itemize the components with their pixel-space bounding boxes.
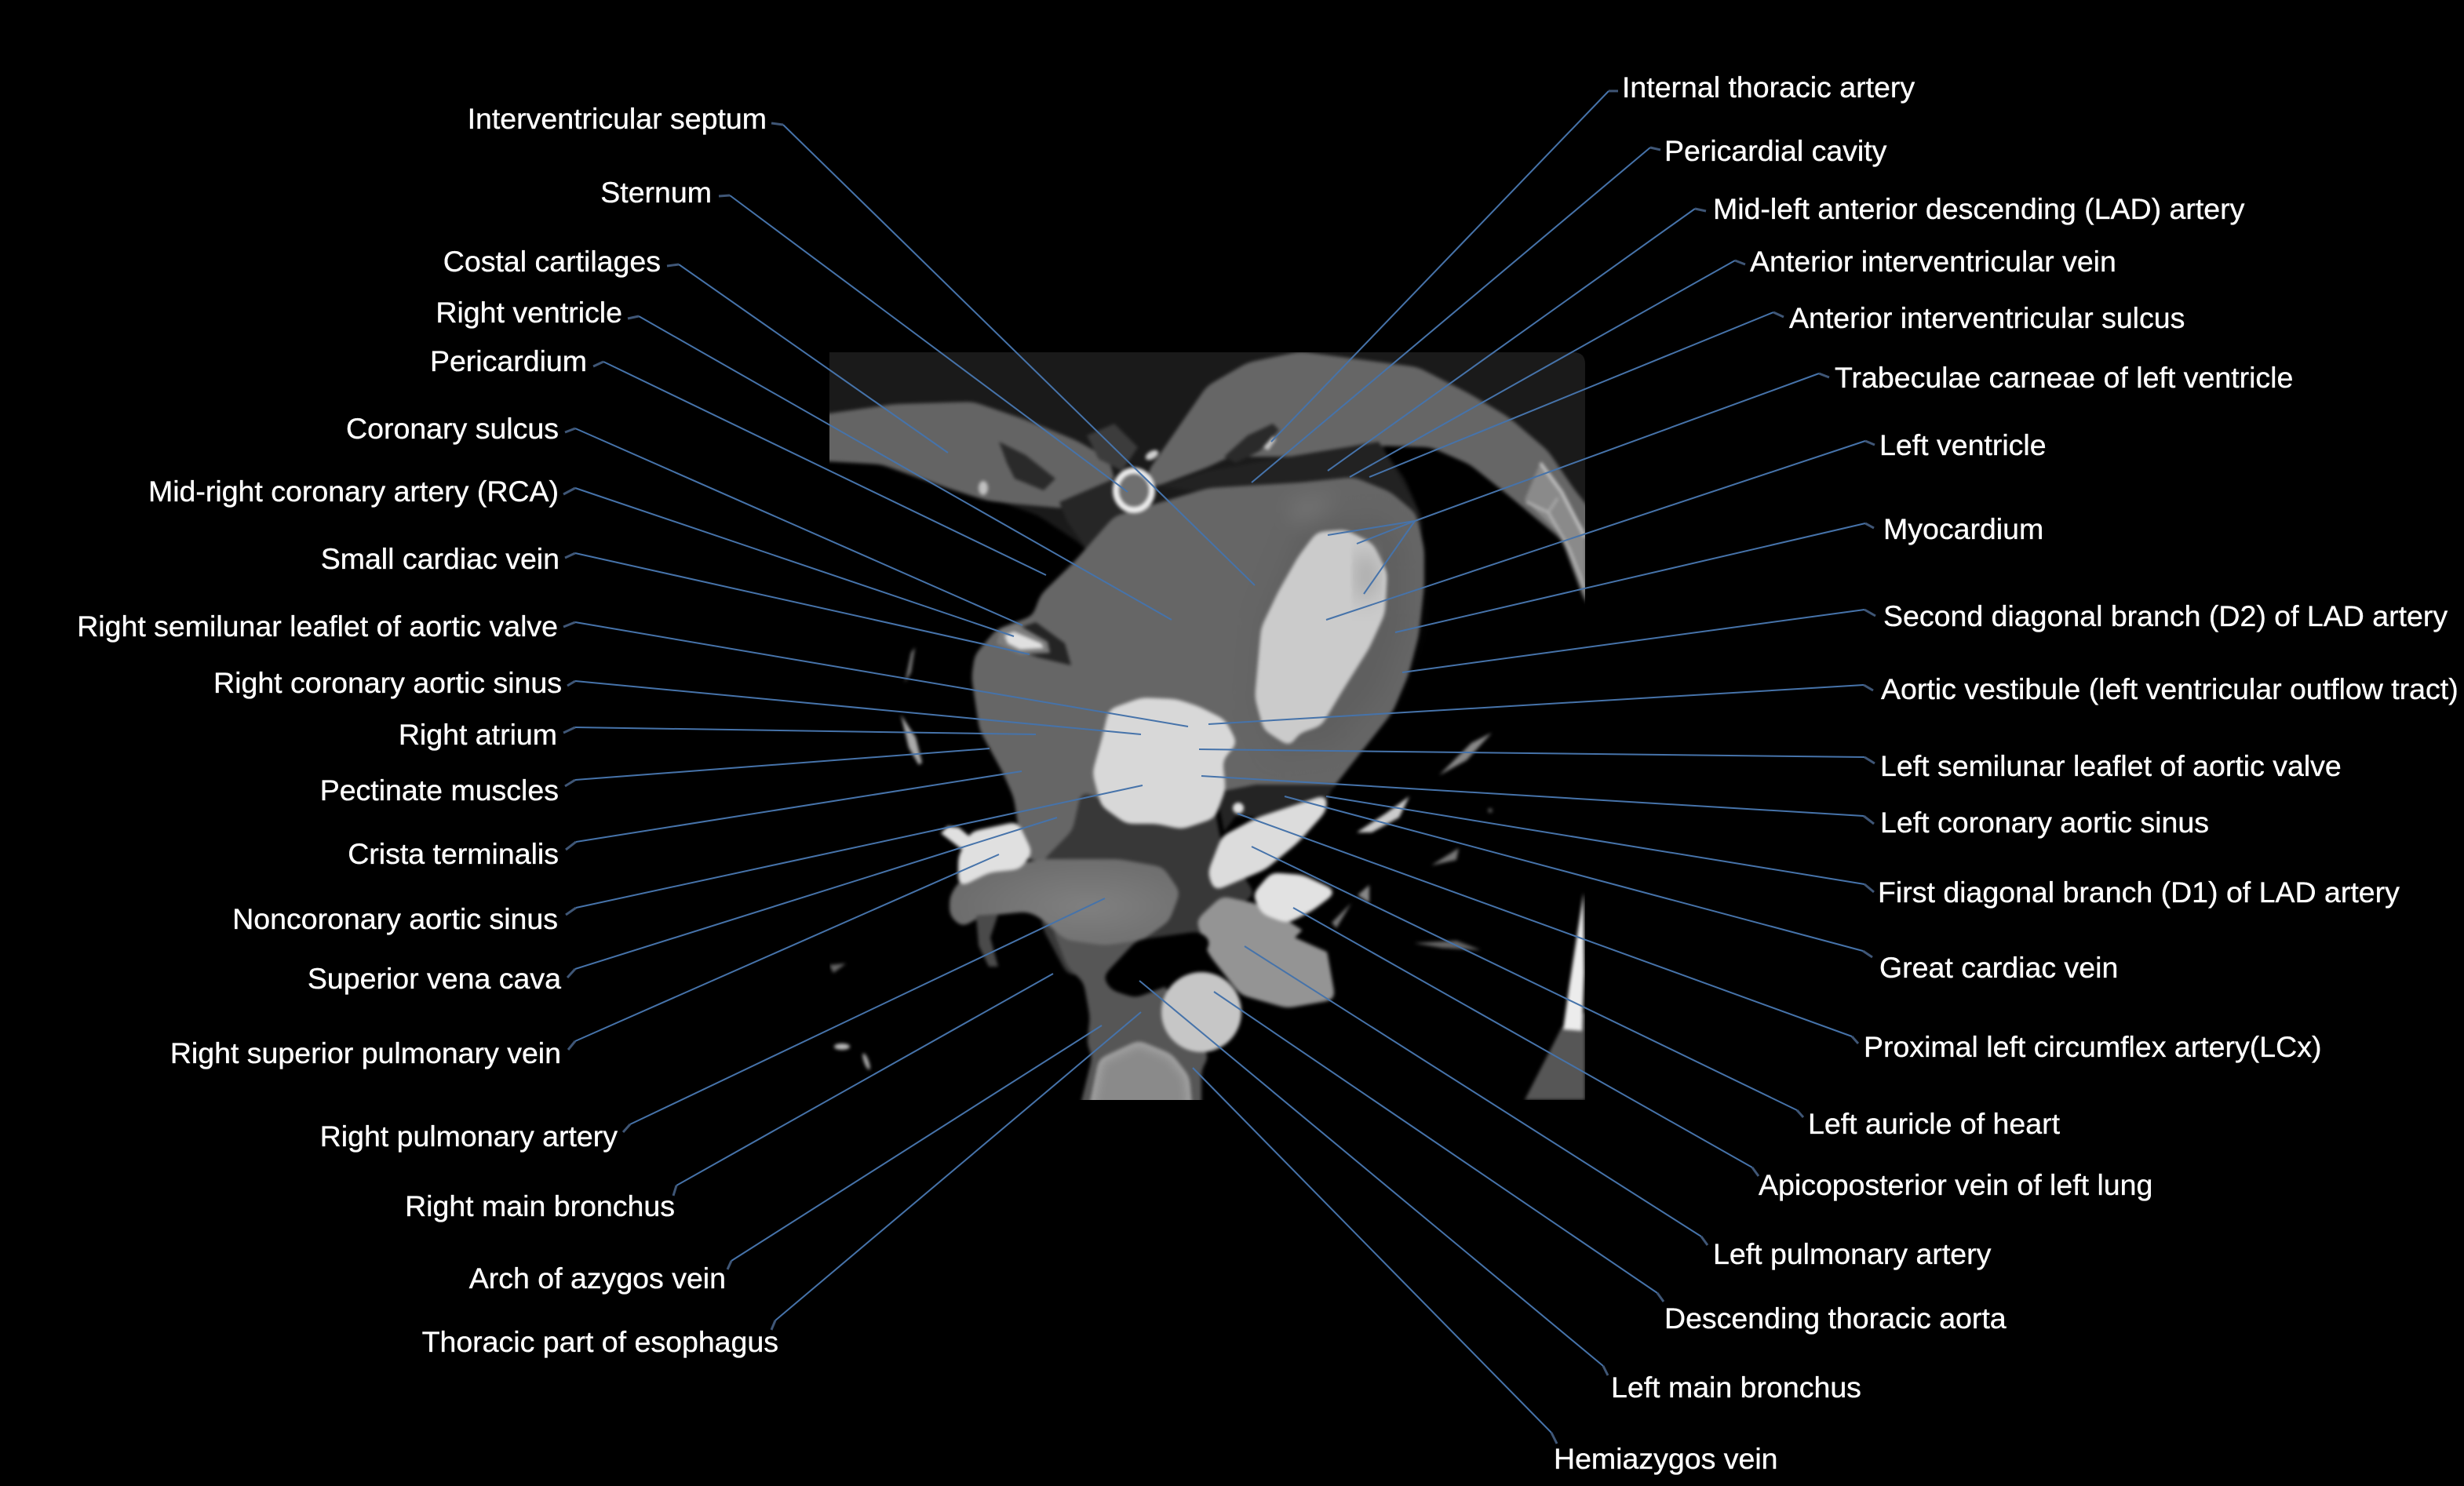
label: Right semilunar leaflet of aortic valve — [77, 610, 1188, 727]
label: Left coronary aortic sinus: Left coronary aortic sinus — [1880, 806, 2209, 839]
label: Left pulmonary artery: Left pulmonary artery — [1713, 1237, 1992, 1270]
aortic root — [1092, 697, 1237, 829]
label: Left auricle of heart: Left auricle of heart — [1808, 1107, 2061, 1140]
label: Right pulmonary artery: Right pulmonary artery — [320, 1120, 618, 1153]
label: Left auricle of heart — [1252, 847, 2061, 1140]
label: First diagonal branch (D1) of LAD artery — [1326, 796, 2400, 909]
label: Great cardiac vein: Great cardiac vein — [1879, 951, 2118, 984]
myocardium shading — [1256, 518, 1405, 753]
label: Internal thoracic artery: Internal thoracic artery — [1622, 71, 1915, 104]
heart — [971, 477, 1424, 861]
label: Pericardial cavity — [1252, 134, 1887, 483]
label: Small cardiac vein: Small cardiac vein — [321, 542, 560, 575]
label: Noncoronary aortic sinus: Noncoronary aortic sinus — [232, 902, 558, 935]
right lower lung chest wall — [1525, 1012, 1585, 1100]
label: Left pulmonary artery — [1245, 946, 1992, 1270]
label: Crista terminalis — [348, 771, 1022, 870]
label: Hemiazygos vein: Hemiazygos vein — [1554, 1442, 1778, 1475]
label: Myocardium — [1395, 512, 2043, 632]
descending aorta — [1161, 972, 1241, 1052]
label: Right superior pulmonary vein — [170, 854, 999, 1069]
label: Internal thoracic artery — [1271, 71, 1915, 442]
label: Thoracic part of esophagus: Thoracic part of esophagus — [422, 1325, 778, 1358]
label: Mid-right coronary artery (RCA) — [148, 475, 1014, 636]
label: Proximal left circumflex artery(LCx): Proximal left circumflex artery(LCx) — [1864, 1030, 2321, 1063]
right chest wall muscle — [829, 400, 1116, 510]
label: Superior vena cava: Superior vena cava — [308, 962, 561, 995]
label: Anterior interventricular sulcus — [1369, 301, 2185, 477]
left pulmonary artery — [1196, 896, 1336, 1008]
label: Coronary sulcus: Coronary sulcus — [346, 412, 559, 445]
label: Small cardiac vein — [321, 542, 1030, 654]
label: Mid-left anterior descending (LAD) artery: Mid-left anterior descending (LAD) artery — [1713, 192, 2245, 225]
label: Right ventricle: Right ventricle — [436, 296, 622, 329]
left main bronchus — [1103, 931, 1212, 998]
label: Anterior interventricular vein — [1350, 245, 2116, 477]
label: Noncoronary aortic sinus — [232, 785, 1143, 935]
label: Interventricular septum — [468, 102, 1255, 585]
label: Pericardial cavity: Pericardial cavity — [1664, 134, 1887, 167]
label: Right coronary aortic sinus — [213, 666, 1141, 734]
label: Apicoposterior vein of left lung — [1293, 908, 2152, 1201]
label: Thoracic part of esophagus — [422, 1012, 1141, 1358]
label: Sternum — [600, 176, 1128, 492]
label: Trabeculae carneae of left ventricle — [1328, 361, 2293, 594]
label: Arch of azygos vein: Arch of azygos vein — [469, 1262, 726, 1295]
label: Right superior pulmonary vein: Right superior pulmonary vein — [170, 1036, 561, 1069]
label: Second diagonal branch (D2) of LAD artery: Second diagonal branch (D2) of LAD artery — [1883, 599, 2448, 632]
vertebra — [1088, 1040, 1194, 1100]
left chest wall band — [1147, 352, 1585, 604]
label: Arch of azygos vein — [469, 1025, 1102, 1295]
apicoposterior vein — [1252, 872, 1338, 923]
label: Left semilunar leaflet of aortic valve: Left semilunar leaflet of aortic valve — [1880, 749, 2342, 782]
label: Pectinate muscles — [320, 748, 990, 807]
label: Right main bronchus — [405, 974, 1053, 1222]
label: Right coronary aortic sinus: Right coronary aortic sinus — [213, 666, 562, 699]
label: Myocardium: Myocardium — [1883, 512, 2043, 545]
label: Pericardium — [430, 344, 1046, 575]
label: Right atrium: Right atrium — [399, 718, 557, 751]
label: Left main bronchus — [1139, 981, 1861, 1404]
label: Interventricular septum: Interventricular septum — [468, 102, 767, 135]
coronary sulcus and right coronary artery — [1022, 621, 1072, 667]
label: Right semilunar leaflet of aortic valve: Right semilunar leaflet of aortic valve — [77, 610, 558, 643]
label: Pericardium: Pericardium — [430, 344, 587, 377]
label: First diagonal branch (D1) of LAD artery: First diagonal branch (D1) of LAD artery — [1878, 876, 2400, 909]
mediastinal fat and chest background — [829, 352, 1585, 548]
label: Costal cartilages — [443, 245, 948, 453]
label: Anterior interventricular sulcus: Anterior interventricular sulcus — [1789, 301, 2185, 334]
label: Great cardiac vein — [1285, 796, 2118, 984]
label: Superior vena cava — [308, 818, 1057, 995]
superior vena cava and right superior pulmonary vein — [958, 821, 1033, 888]
label: Aortic vestibule (left ventricular outflow tract): Aortic vestibule (left ventricular outflow tract) — [1881, 672, 2459, 705]
label: Trabeculae carneae of left ventricle: Trabeculae carneae of left ventricle — [1835, 361, 2293, 394]
rib — [1525, 463, 1585, 599]
label: Hemiazygos vein — [1193, 1068, 1778, 1475]
label: Crista terminalis: Crista terminalis — [348, 837, 559, 870]
label: Descending thoracic aorta — [1214, 992, 2007, 1335]
label: Second diagonal branch (D2) of LAD artery — [1402, 599, 2448, 672]
label: Right pulmonary artery — [320, 898, 1105, 1153]
left ventricle cavity — [1255, 530, 1387, 747]
label: Mid-right coronary artery (RCA): Mid-right coronary artery (RCA) — [148, 475, 559, 508]
label: Anterior interventricular vein: Anterior interventricular vein — [1750, 245, 2116, 278]
label: Costal cartilages: Costal cartilages — [443, 245, 661, 278]
label: Coronary sulcus — [346, 412, 1022, 625]
sternum — [1116, 471, 1152, 510]
label: Right ventricle — [436, 296, 1172, 620]
CT scan image — [829, 352, 1585, 1100]
label: Aortic vestibule (left ventricular outflow tract) — [1208, 672, 2459, 724]
label: Mid-left anterior descending (LAD) artery — [1328, 192, 2245, 471]
label: Right main bronchus: Right main bronchus — [405, 1189, 675, 1222]
label: Right atrium — [399, 718, 1036, 751]
lung vessels — [905, 647, 915, 683]
right pulmonary artery — [950, 859, 1180, 945]
label: Sternum: Sternum — [600, 176, 712, 209]
label: Proximal left circumflex artery(LCx) — [1237, 814, 2321, 1063]
label: Left ventricle: Left ventricle — [1879, 428, 2047, 461]
label: Left coronary aortic sinus — [1201, 776, 2209, 839]
left auricle — [1208, 794, 1328, 891]
label: Apicoposterior vein of left lung: Apicoposterior vein of left lung — [1759, 1168, 2152, 1201]
label: Left ventricle — [1326, 428, 2047, 620]
label: Left semilunar leaflet of aortic valve — [1199, 749, 2342, 782]
label: Pectinate muscles: Pectinate muscles — [320, 774, 559, 807]
label: Left main bronchus: Left main bronchus — [1611, 1371, 1861, 1404]
posterior mediastinum and esophagus — [1054, 931, 1209, 1100]
label: Descending thoracic aorta: Descending thoracic aorta — [1664, 1302, 2007, 1335]
mediastinum — [1042, 791, 1256, 977]
